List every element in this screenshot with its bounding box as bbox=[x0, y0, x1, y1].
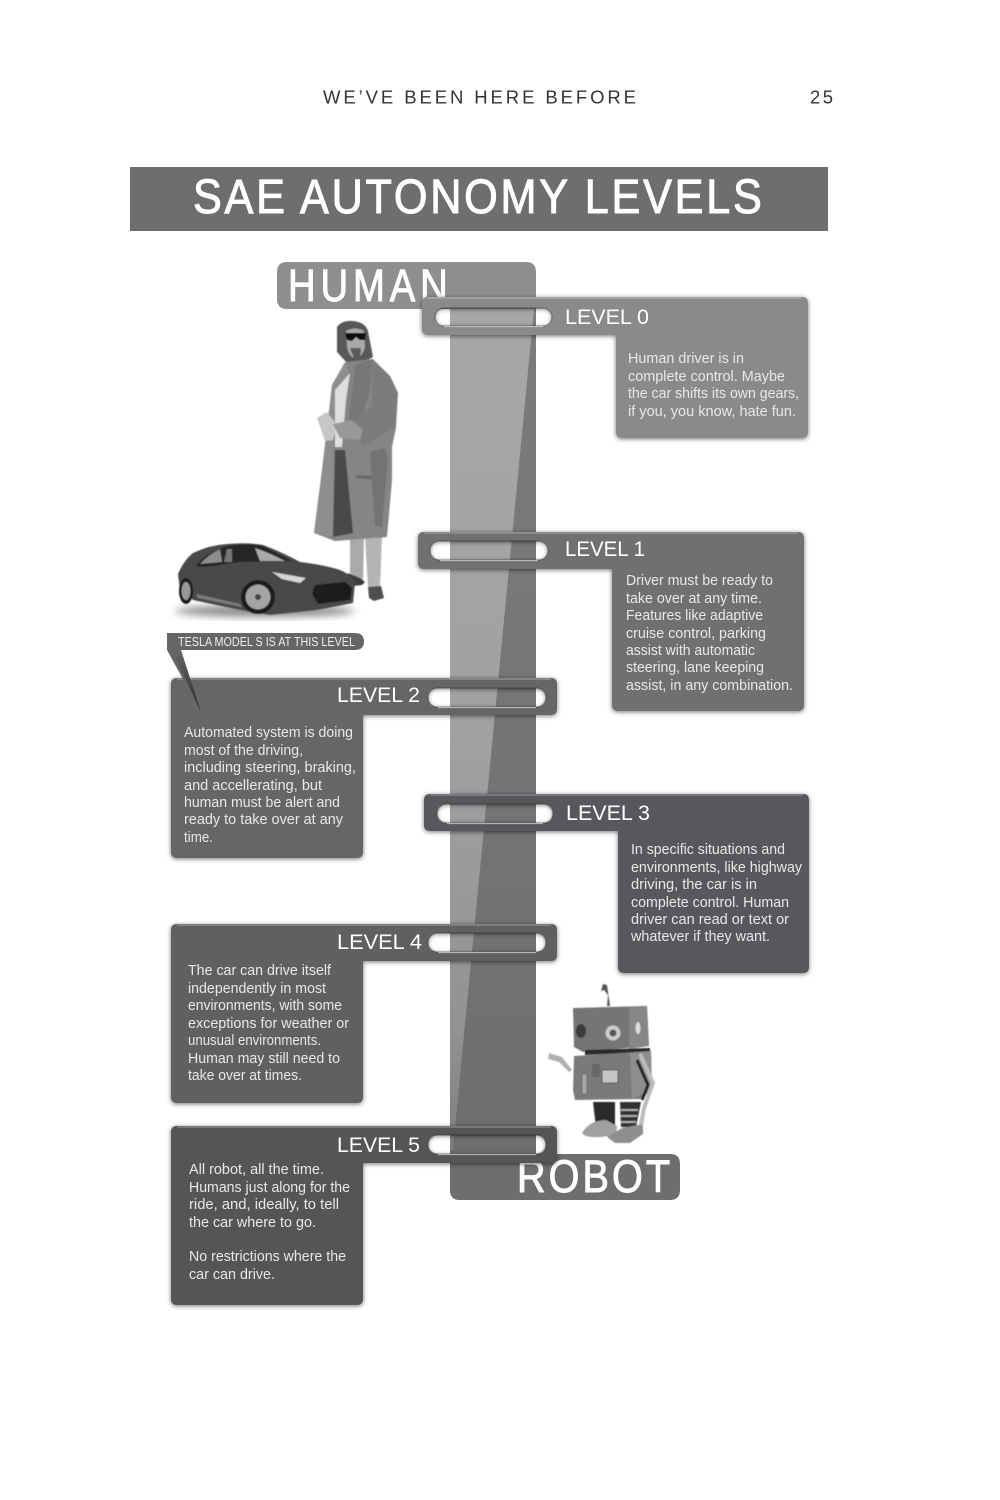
description: level 4: unusual environments. bbox=[188, 1033, 321, 1049]
description: level 1: cruise control, parking bbox=[626, 626, 766, 642]
description: level 0: complete control. Maybe bbox=[628, 369, 785, 385]
description: level 4 bbox=[188, 963, 349, 1084]
timeline column from human to robot bbox=[277, 262, 536, 1200]
description: level 3: driver can read or text or bbox=[631, 912, 789, 928]
page number: 25 bbox=[810, 86, 833, 108]
callout: Tesla Model S level: TESLA MODEL S IS AT THIS LEVEL bbox=[178, 634, 355, 649]
panel: level 4 bbox=[171, 924, 557, 1103]
description: level 3: In specific situations and bbox=[631, 842, 785, 858]
description: level 5: All robot, all the time. bbox=[189, 1162, 324, 1178]
heading: level 2: LEVEL 2 bbox=[337, 684, 420, 707]
HUMAN label: HUMAN bbox=[288, 260, 448, 311]
description: level 0: if you, you know, hate fun. bbox=[628, 404, 796, 420]
description: level 4: independently in most bbox=[188, 981, 326, 997]
description: level 1: Driver must be ready to bbox=[626, 573, 773, 589]
illustration: man in robe bbox=[314, 321, 398, 601]
description: level 3: driving, the car is in bbox=[631, 877, 757, 893]
description: level 5: the car where to go. bbox=[189, 1215, 316, 1231]
heading: level 4: LEVEL 4 bbox=[337, 931, 422, 954]
description: level 4: Human may still need to bbox=[188, 1051, 340, 1067]
description: level 1: steering, lane keeping bbox=[626, 660, 764, 676]
description: level 5: No restrictions where the bbox=[189, 1249, 346, 1265]
description: level 1: assist, in any combination. bbox=[626, 678, 793, 694]
description: level 2: most of the driving, bbox=[184, 743, 303, 759]
heading: level 3: LEVEL 3 bbox=[566, 802, 650, 825]
description: level 1: assist with automatic bbox=[626, 643, 755, 659]
description: level 2: Automated system is doing bbox=[184, 725, 353, 741]
heading: level 1: LEVEL 1 bbox=[565, 538, 645, 561]
illustration: robot bbox=[548, 984, 653, 1143]
panel: level 0 bbox=[422, 297, 808, 438]
description: level 2: ready to take over at any bbox=[184, 812, 344, 828]
description: level 0: Human driver is in bbox=[628, 351, 744, 367]
description: level 4: take over at times. bbox=[188, 1068, 302, 1084]
description: level 2: human must be alert and bbox=[184, 795, 340, 811]
description: level 1 bbox=[626, 573, 793, 694]
heading: level 5: LEVEL 5 bbox=[337, 1134, 420, 1157]
description: level 0: the car shifts its own gears, bbox=[628, 386, 799, 402]
description: level 5 bbox=[189, 1162, 350, 1283]
description: level 3: environments, like highway bbox=[631, 860, 803, 876]
description: level 3 bbox=[630, 842, 803, 945]
description: level 4: exceptions for weather or bbox=[188, 1016, 349, 1032]
description: level 4: The car can drive itself bbox=[188, 963, 332, 979]
panel: level 2 bbox=[171, 678, 557, 858]
illustration: Tesla Model S bbox=[175, 543, 355, 617]
description: level 3: complete control. Human bbox=[631, 895, 789, 911]
panel: level 1 bbox=[418, 532, 804, 711]
callout: Tesla Model S level bbox=[167, 633, 364, 712]
description: level 4: environments, with some bbox=[188, 998, 342, 1014]
description: level 2: including steering, braking, bbox=[184, 760, 356, 776]
title banner: SAE AUTONOMY LEVELS bbox=[193, 170, 762, 224]
ROBOT label: ROBOT bbox=[517, 1152, 670, 1202]
description: level 2: and accellerating, but bbox=[184, 778, 322, 794]
description: level 2: time. bbox=[184, 830, 213, 846]
description: level 0 bbox=[628, 351, 799, 420]
description: level 3: whatever if they want. bbox=[630, 929, 770, 945]
description: level 2 bbox=[184, 725, 356, 846]
heading: level 0: LEVEL 0 bbox=[565, 306, 649, 329]
panel: level 5 bbox=[171, 1126, 557, 1305]
description: level 1: Features like adaptive bbox=[626, 608, 763, 624]
description: level 5: car can drive. bbox=[189, 1267, 275, 1283]
panel: level 3 bbox=[424, 794, 809, 973]
page header: WE’VE BEEN HERE BEFORE bbox=[323, 86, 636, 108]
description: level 5: ride, and, ideally, to tell bbox=[189, 1197, 339, 1213]
description: level 1: take over at any time. bbox=[626, 591, 762, 607]
description: level 5: Humans just along for the bbox=[189, 1180, 350, 1196]
title banner bbox=[130, 167, 828, 231]
